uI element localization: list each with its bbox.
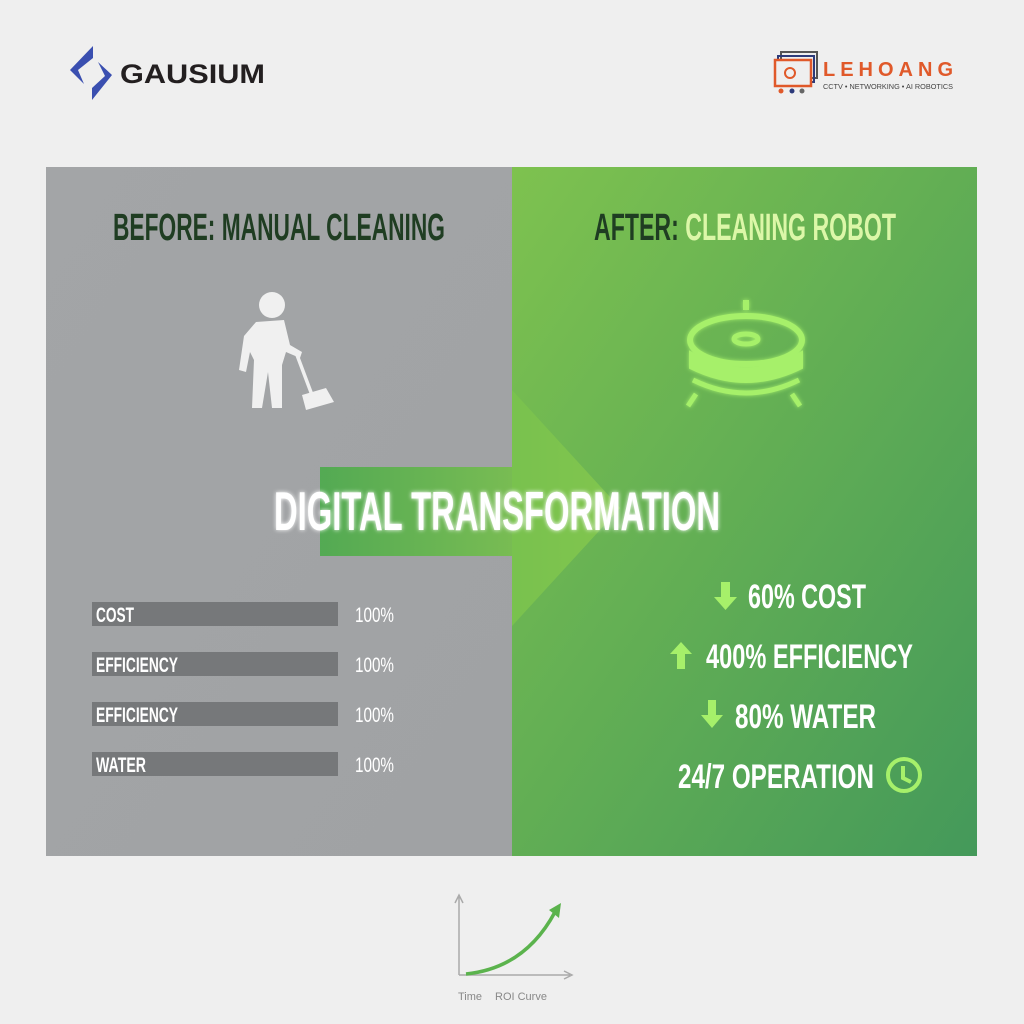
bar chart: before metrics: WATER [96, 754, 146, 777]
bar chart: before metrics: COST [96, 604, 134, 627]
chart: roi curve: Time [458, 991, 482, 1003]
heading: after: AFTER: CLEANING ROBOT [594, 207, 896, 249]
panel: after [512, 167, 977, 856]
stats: after results: 400% EFFICIENCY [706, 638, 913, 676]
icon: clock [888, 759, 920, 791]
bar chart: before metrics: EFFICIENCY [96, 704, 178, 727]
bar chart: before metrics: EFFICIENCY [96, 654, 178, 677]
label: digital transformation: DIGITAL TRANSFORMATION [274, 480, 720, 542]
bar chart: before metrics: 100% [355, 604, 394, 627]
bar chart: before metrics [92, 602, 394, 777]
bar chart: before metrics: 100% [355, 654, 394, 677]
logo: lehoang [775, 52, 953, 94]
stats: after results: 80% WATER [735, 698, 876, 736]
stats: after results: 24/7 OPERATION [678, 758, 874, 796]
bar chart: before metrics: 100% [355, 704, 394, 727]
logo: lehoang: CCTV • NETWORKING • AI ROBOTICS [823, 82, 953, 91]
heading: before: BEFORE: MANUAL CLEANING [113, 207, 445, 249]
icon: down arrow cost [714, 582, 737, 610]
chart: roi curve [455, 895, 572, 1003]
icon: down arrow water [701, 700, 723, 728]
logo: lehoang: LEHOANG [823, 59, 953, 81]
bar chart: before metrics: 100% [355, 754, 394, 777]
stats: after results [670, 578, 920, 796]
chart: roi curve: ROI Curve [495, 991, 547, 1003]
arrow: digital transformation [274, 390, 720, 626]
panel: before [46, 167, 512, 856]
icon: robot vacuum [688, 300, 802, 406]
logo: gausium [70, 46, 265, 100]
stats: after results: 60% COST [748, 578, 866, 616]
icon: worker with broom [239, 292, 334, 410]
icon: up arrow efficiency [670, 642, 692, 669]
logo: gausium: GAUSIUM [120, 59, 265, 89]
